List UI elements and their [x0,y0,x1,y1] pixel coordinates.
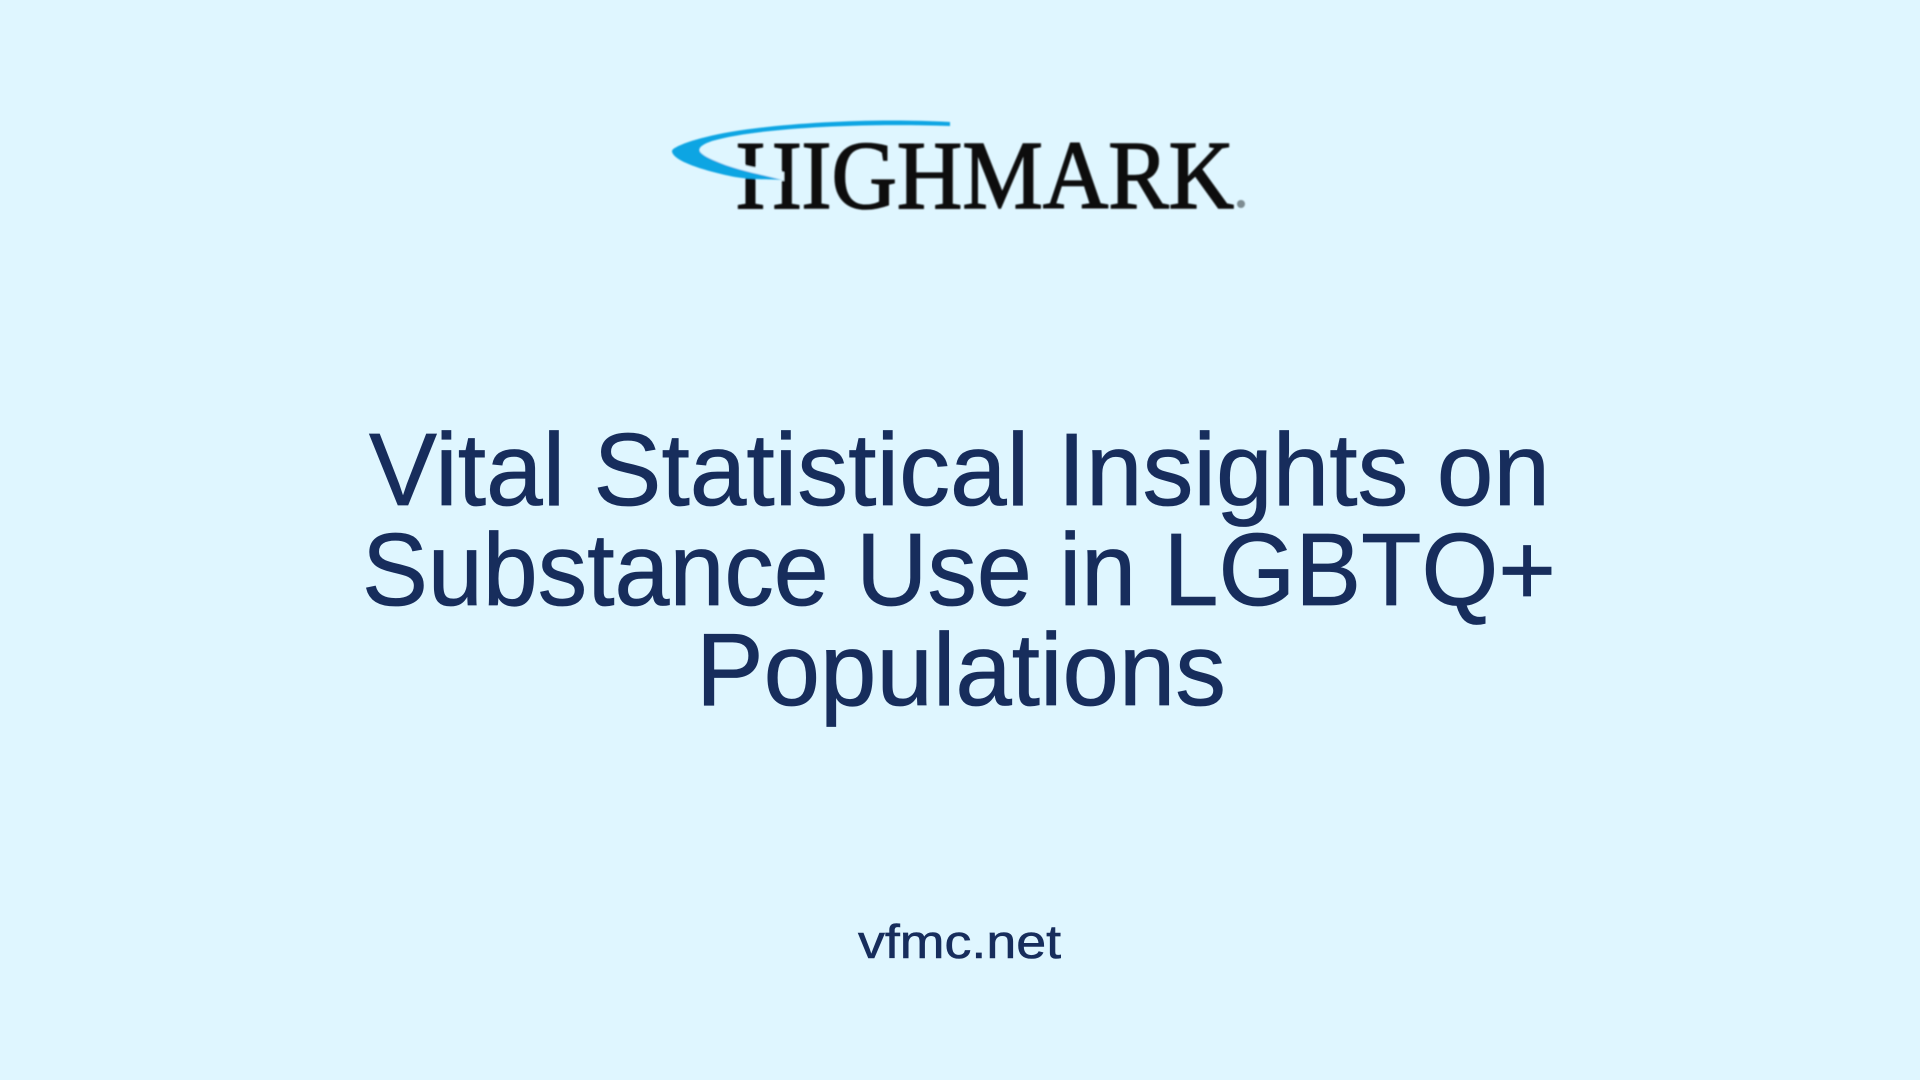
logo: Highmark [672,120,1245,230]
logo registered mark [1237,200,1245,208]
logo wordmark: HIGHMARK [736,122,1234,230]
site name: vfmc.net [858,915,1061,968]
title [362,412,1556,727]
title line 2: Substance Use in LGBTQ+ [362,512,1556,627]
title line 3: Populations [696,612,1226,727]
logo swoosh gap [700,150,784,181]
title line 1: Vital Statistical Insights on [369,412,1550,527]
logo swoosh [672,120,950,180]
